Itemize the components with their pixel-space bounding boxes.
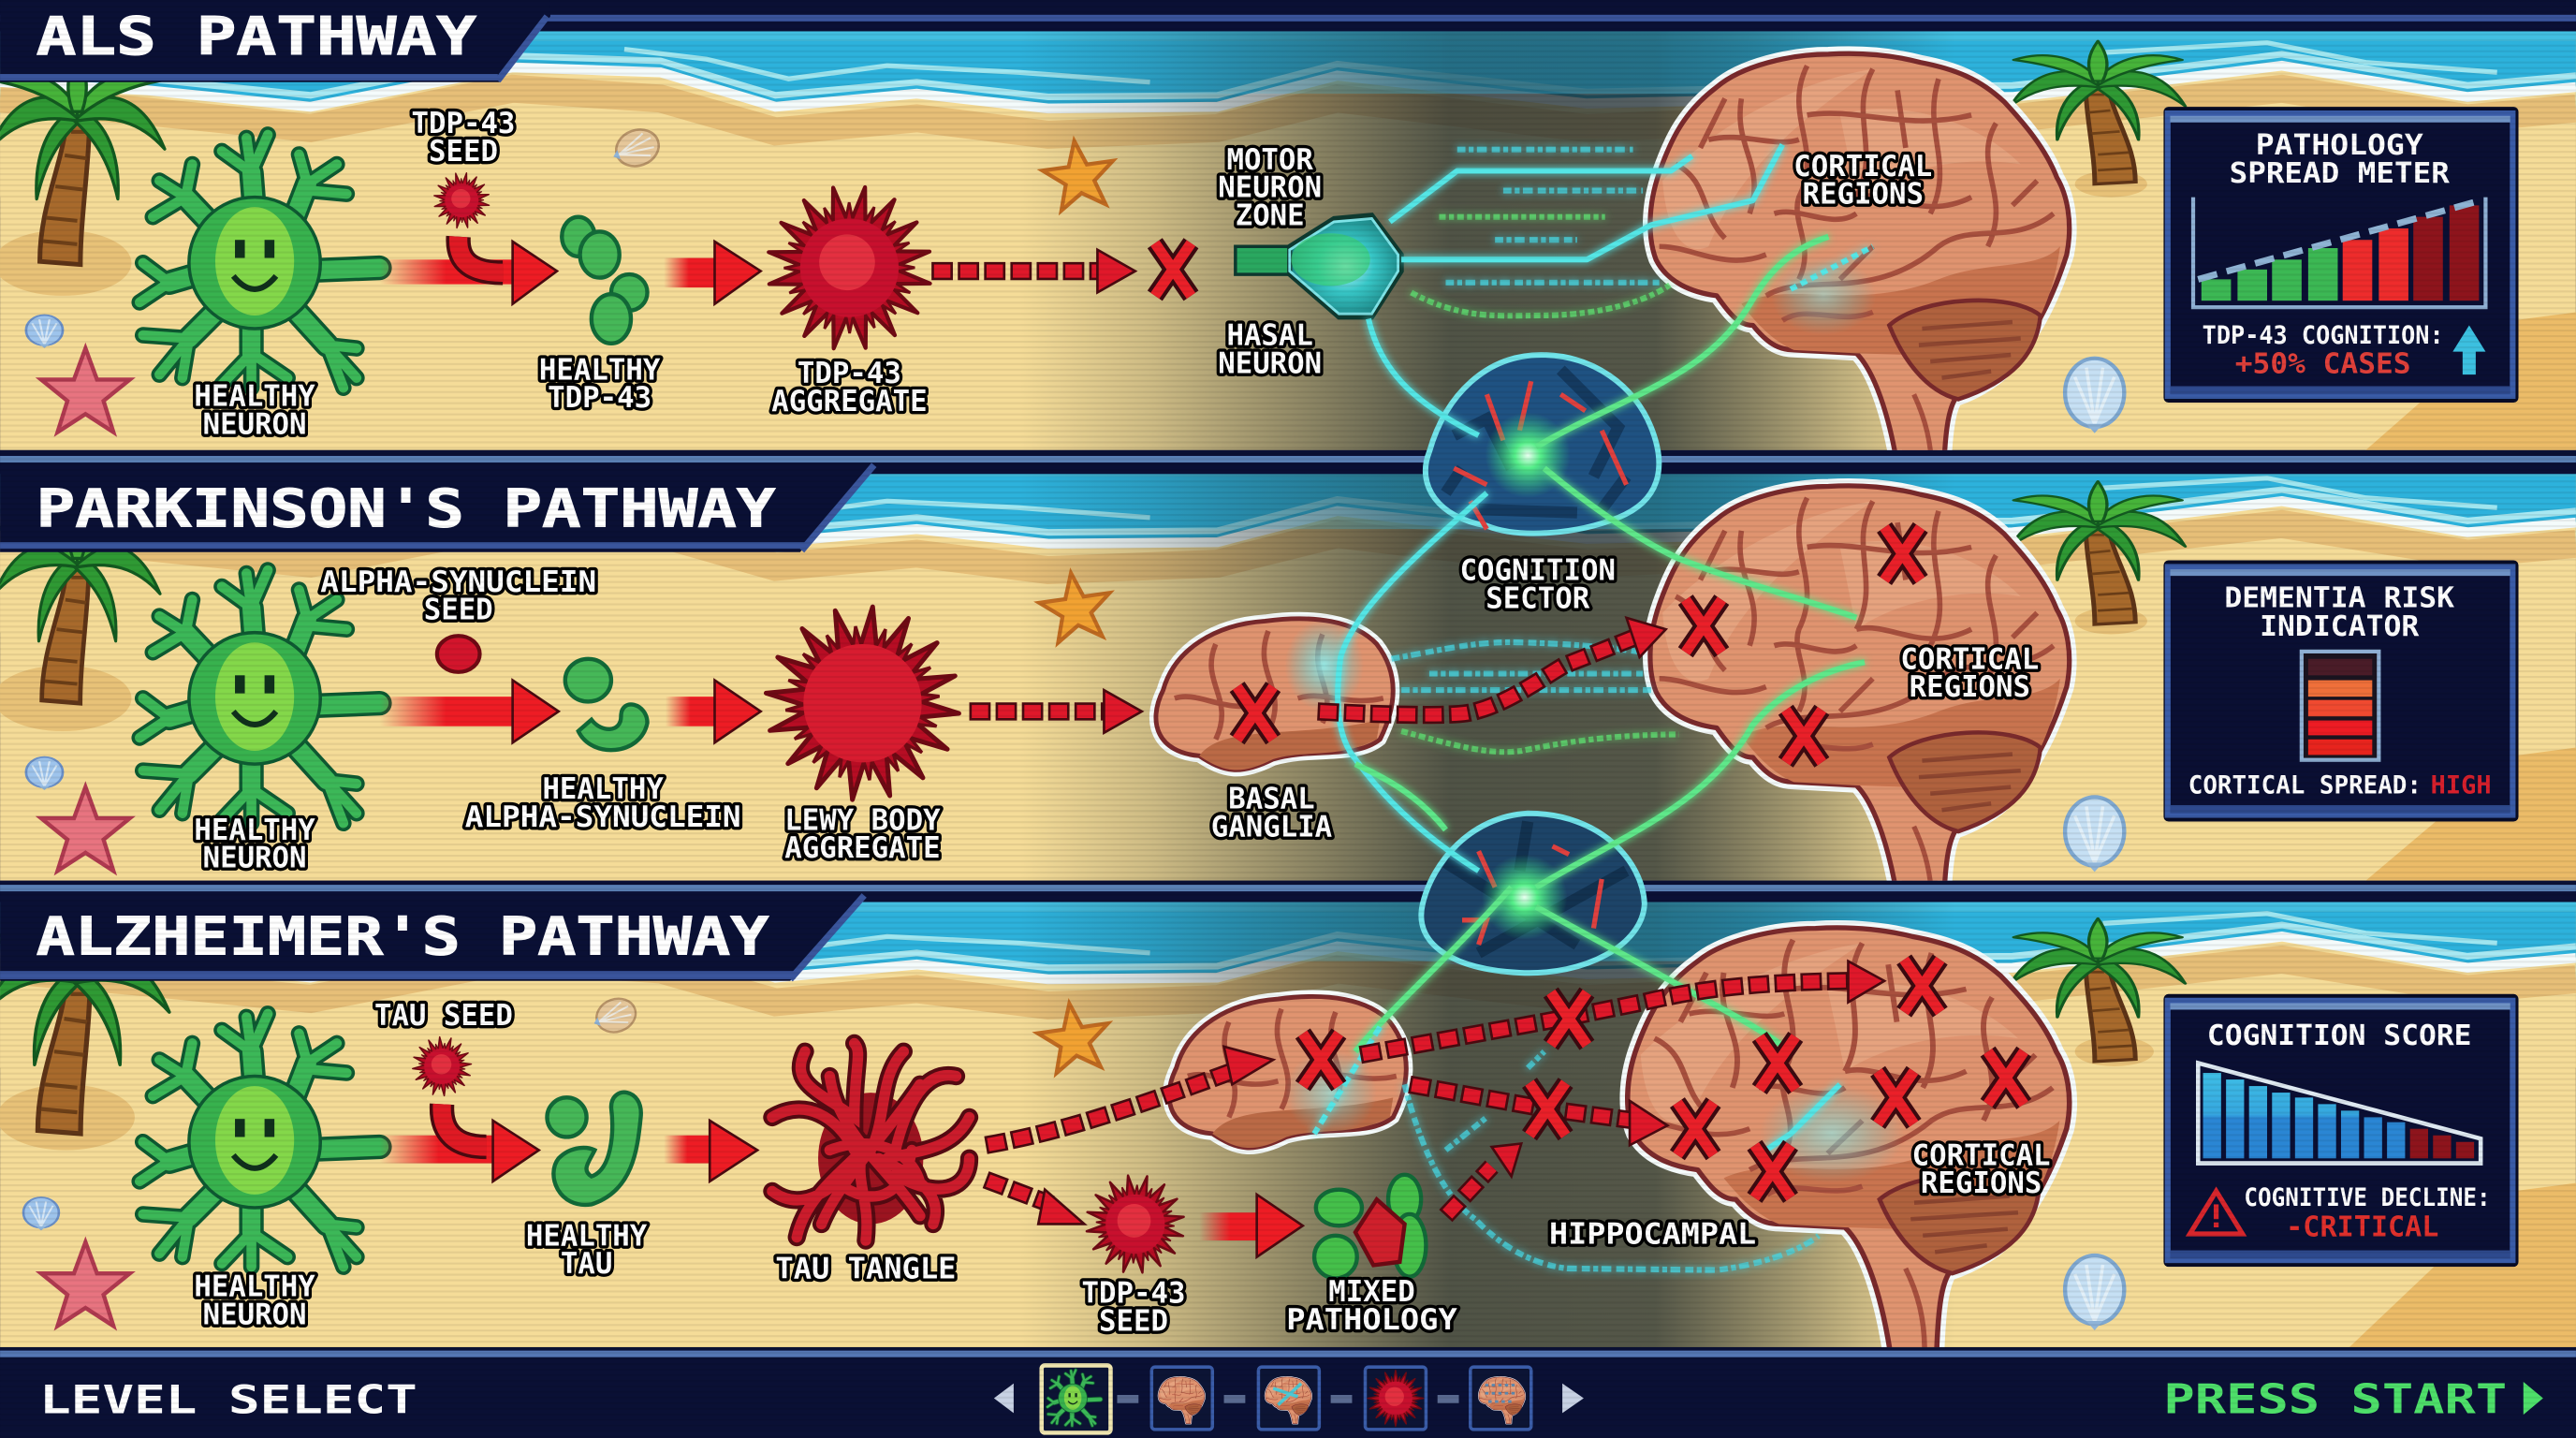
panel: dementia risk indicator: HIGH	[2431, 772, 2492, 800]
marker: cortical X 3	[1786, 710, 1822, 762]
heading: Alzheimer's pathway: ALZHEIMER'S PATHWAY	[37, 907, 769, 968]
labels: ALS pathway: NEURON	[1218, 346, 1322, 380]
heading: ALS pathway	[0, 0, 550, 82]
arrow: to aggregate	[664, 242, 761, 304]
panel: pathology spread meter: +50% CASES	[2235, 347, 2411, 380]
arrow: to tau tangle	[664, 1121, 757, 1181]
level icon: cyan brain	[1258, 1367, 1319, 1430]
labels: ALS pathway: TDP-43	[412, 107, 515, 140]
heading: Parkinson's pathway: PARKINSON'S PATHWAY	[37, 478, 776, 539]
icon: right selector arrow	[1562, 1384, 1584, 1413]
panel: dementia risk indicator: DEMENTIA RISK	[2224, 581, 2454, 614]
labels: Alzheimer's pathway: REGIONS	[1921, 1167, 2042, 1200]
arrow: to Lewy body	[666, 681, 761, 742]
icon: healthy neuron	[139, 135, 379, 388]
labels: Alzheimer's pathway: MIXED	[1328, 1275, 1415, 1309]
arrow: dotted spread	[931, 250, 1135, 292]
labels: Parkinson's pathway: HEALTHY	[194, 814, 315, 847]
meter: risk level	[2302, 652, 2378, 760]
bar chart: spread meter	[2193, 198, 2485, 307]
arrow: neuron to healthy tau	[379, 1104, 539, 1181]
labels: Alzheimer's pathway: NEURON	[203, 1299, 307, 1332]
call to action: press start: PRESS START	[2163, 1375, 2507, 1423]
marker: cortical X 2	[1884, 527, 1921, 580]
panel: cognition score	[2163, 994, 2519, 1267]
labels: Alzheimer's pathway: TDP-43	[1082, 1277, 1185, 1311]
icon: warning triangle	[2190, 1191, 2243, 1234]
arrows: Parkinson's red spread	[1318, 618, 1666, 715]
panel: dementia risk indicator: INDICATOR	[2260, 610, 2419, 643]
labels: Parkinson's pathway: GANGLIA	[1211, 810, 1332, 844]
arrow: neuron to healthy TDP-43	[379, 237, 557, 304]
icon: mixed pathology	[1314, 1175, 1426, 1278]
level icon: red aggregate	[1365, 1367, 1426, 1430]
labels: ALS pathway: TDP-43	[548, 381, 651, 415]
icon: healthy tau	[547, 1093, 641, 1205]
labels: Parkinson's pathway: ALPHA-SYNUCLEIN	[320, 565, 596, 599]
icon: healthy neuron	[139, 1014, 379, 1267]
heading: Alzheimer's pathway	[0, 892, 866, 981]
panel: pathology spread meter	[2163, 107, 2519, 403]
icon: up arrow	[2452, 325, 2485, 374]
labels: Alzheimer's pathway: TAU TANGLE	[775, 1252, 956, 1285]
labels: Alzheimer's pathway: HEALTHY	[526, 1219, 648, 1253]
marker: X	[1155, 243, 1191, 296]
icon: TDP-43 seed	[433, 172, 490, 228]
markers: Alzheimer's X marks	[1303, 960, 2024, 1197]
heading: level select: LEVEL SELECT	[39, 1376, 417, 1422]
labels: Parkinson's pathway: HEALTHY	[542, 772, 664, 806]
icon: tau tangle	[772, 1043, 970, 1240]
labels: ALS pathway: AGGREGATE	[771, 385, 928, 418]
labels: ALS pathway: SEED	[429, 135, 498, 169]
labels: Parkinson's pathway: LEWY BODY	[784, 803, 941, 837]
labels: Parkinson's pathway: COGNITION	[1460, 554, 1616, 588]
labels: ALS pathway	[194, 107, 1932, 441]
icon: healthy alpha-synuclein blobs	[565, 659, 648, 750]
labels: ALS pathway: NEURON	[1218, 171, 1322, 205]
dividers and frame bars	[0, 0, 2576, 902]
labels: ALS pathway: ZONE	[1236, 198, 1305, 232]
labels: ALS pathway: HASAL	[1226, 319, 1313, 353]
arrow: to mixed pathology	[1199, 1195, 1303, 1257]
panel: dementia risk indicator: CORTICAL SPREAD:	[2188, 772, 2422, 800]
panel: Parkinson's pathway	[0, 474, 2576, 881]
icon: TDP-43 seed	[1086, 1174, 1185, 1274]
labels: Parkinson's pathway	[194, 554, 2039, 875]
icon: TDP-43 aggregate	[767, 185, 932, 350]
labels: ALS pathway: MOTOR	[1226, 143, 1313, 177]
labels: Alzheimer's pathway	[194, 999, 2051, 1339]
icon: cognition sector hub top	[1426, 355, 1659, 534]
labels: Alzheimer's pathway: CORTICAL	[1912, 1138, 2051, 1172]
icon: healthy TDP-43 blobs	[562, 217, 648, 344]
bar chart: declining cognition	[2198, 1064, 2481, 1164]
labels: Alzheimer's pathway: HEALTHY	[194, 1270, 315, 1304]
labels: Parkinson's pathway: CORTICAL	[1900, 642, 2039, 676]
heading: ALS pathway: ALS PATHWAY	[37, 7, 476, 67]
labels: Parkinson's pathway: NEURON	[203, 842, 307, 875]
level icon: basal brain	[1151, 1367, 1212, 1430]
labels: Parkinson's pathway: ALPHA-SYNUCLEIN	[465, 800, 741, 834]
level icon: neuron (selected)	[1042, 1365, 1110, 1432]
labels: Parkinson's pathway: SECTOR	[1486, 581, 1590, 615]
panel: Alzheimer's pathway	[0, 871, 2576, 1351]
icon: tau seed	[412, 1035, 472, 1097]
labels: ALS pathway: REGIONS	[1803, 178, 1924, 212]
icon: start triangle	[2524, 1382, 2543, 1415]
neural connection lines	[1314, 144, 1873, 1270]
marker: basal ganglia X	[1237, 687, 1273, 740]
panel: cognition score: COGNITIVE DECLINE:	[2244, 1184, 2491, 1212]
heading: Parkinson's pathway	[0, 463, 877, 552]
labels: Alzheimer's pathway: PATHOLOGY	[1286, 1303, 1457, 1337]
labels: ALS pathway: NEURON	[203, 407, 307, 441]
panel: dementia risk indicator	[2163, 560, 2519, 822]
labels: ALS pathway: TDP-43	[798, 357, 901, 390]
labels: Parkinson's pathway: REGIONS	[1910, 670, 2030, 704]
labels: Alzheimer's pathway: TAU	[561, 1247, 612, 1281]
icon: Lewy body aggregate	[764, 605, 961, 802]
labels: ALS pathway: HEALTHY	[539, 353, 661, 387]
labels: ALS pathway: CORTICAL	[1793, 150, 1932, 183]
marker: cortical X 1	[1686, 600, 1721, 653]
panel: ALS pathway	[0, 31, 2576, 450]
icon: healthy neuron	[139, 570, 379, 823]
arrows: Alzheimer's red spread	[986, 961, 1884, 1224]
panel: pathology spread meter: TDP-43 COGNITION:	[2203, 322, 2444, 350]
level icon: speckled brain	[1471, 1367, 1531, 1430]
icon: motor neuron body	[1236, 215, 1401, 317]
panel: cognition score: COGNITION SCORE	[2207, 1020, 2471, 1052]
panel: bottom level select bar	[0, 1347, 2576, 1438]
icon: left selector arrow	[994, 1384, 1014, 1413]
icon: alpha-synuclein seed	[437, 636, 480, 672]
arrow: dotted spread to basal ganglia	[970, 690, 1142, 733]
labels: Alzheimer's pathway: TAU SEED	[374, 999, 513, 1033]
panel: cognition score: -CRITICAL	[2286, 1211, 2438, 1244]
labels: ALS pathway: HEALTHY	[194, 379, 315, 413]
panel: pathology spread meter: PATHOLOGY	[2256, 129, 2423, 162]
arrow: neuron to healthy alpha-synuclein	[379, 681, 559, 742]
labels: Alzheimer's pathway: HIPPOCAMPAL	[1549, 1218, 1756, 1252]
labels: Parkinson's pathway: BASAL	[1228, 782, 1315, 815]
icon: cognition sector hub bottom	[1421, 814, 1645, 973]
labels: Parkinson's pathway: AGGREGATE	[784, 831, 941, 865]
labels: Alzheimer's pathway: SEED	[1099, 1305, 1168, 1339]
labels: Parkinson's pathway: SEED	[424, 594, 493, 627]
panel: pathology spread meter: SPREAD METER	[2230, 157, 2450, 190]
